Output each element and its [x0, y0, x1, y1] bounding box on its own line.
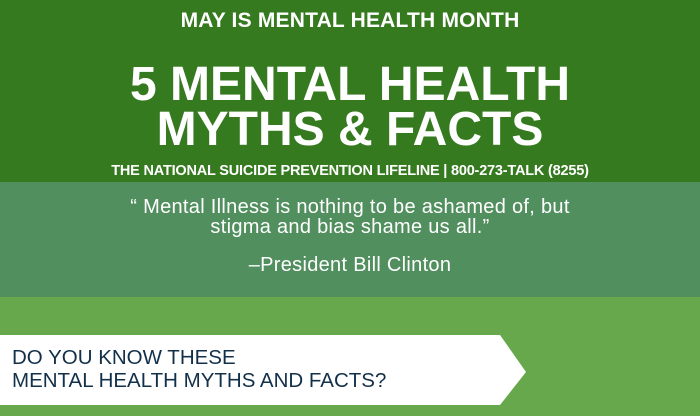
text: quote — [130, 196, 570, 238]
text: lifeline: THE NATIONAL SUICIDE PREVENTION LIFELINE | 800-273-TALK (8255) — [111, 163, 589, 179]
text: attribution: –President Bill Clinton — [249, 254, 451, 276]
panel: header — [0, 0, 700, 182]
title: MYTHS & FACTS — [157, 103, 543, 156]
banner: do you know: MENTAL HEALTH MYTHS AND FACTS? — [12, 369, 386, 392]
banner: do you know — [0, 335, 526, 405]
text: quote: “ Mental Illness is nothing to be ashamed of, but — [130, 196, 570, 218]
banner: do you know: DO YOU KNOW THESE — [12, 346, 236, 369]
title — [130, 58, 570, 156]
title: 5 MENTAL HEALTH — [130, 58, 570, 111]
panel: quote — [0, 182, 700, 297]
heading: may is mental health month: MAY IS MENTAL HEALTH MONTH — [181, 9, 519, 32]
text: quote: stigma and bias shame us all.” — [210, 216, 490, 238]
